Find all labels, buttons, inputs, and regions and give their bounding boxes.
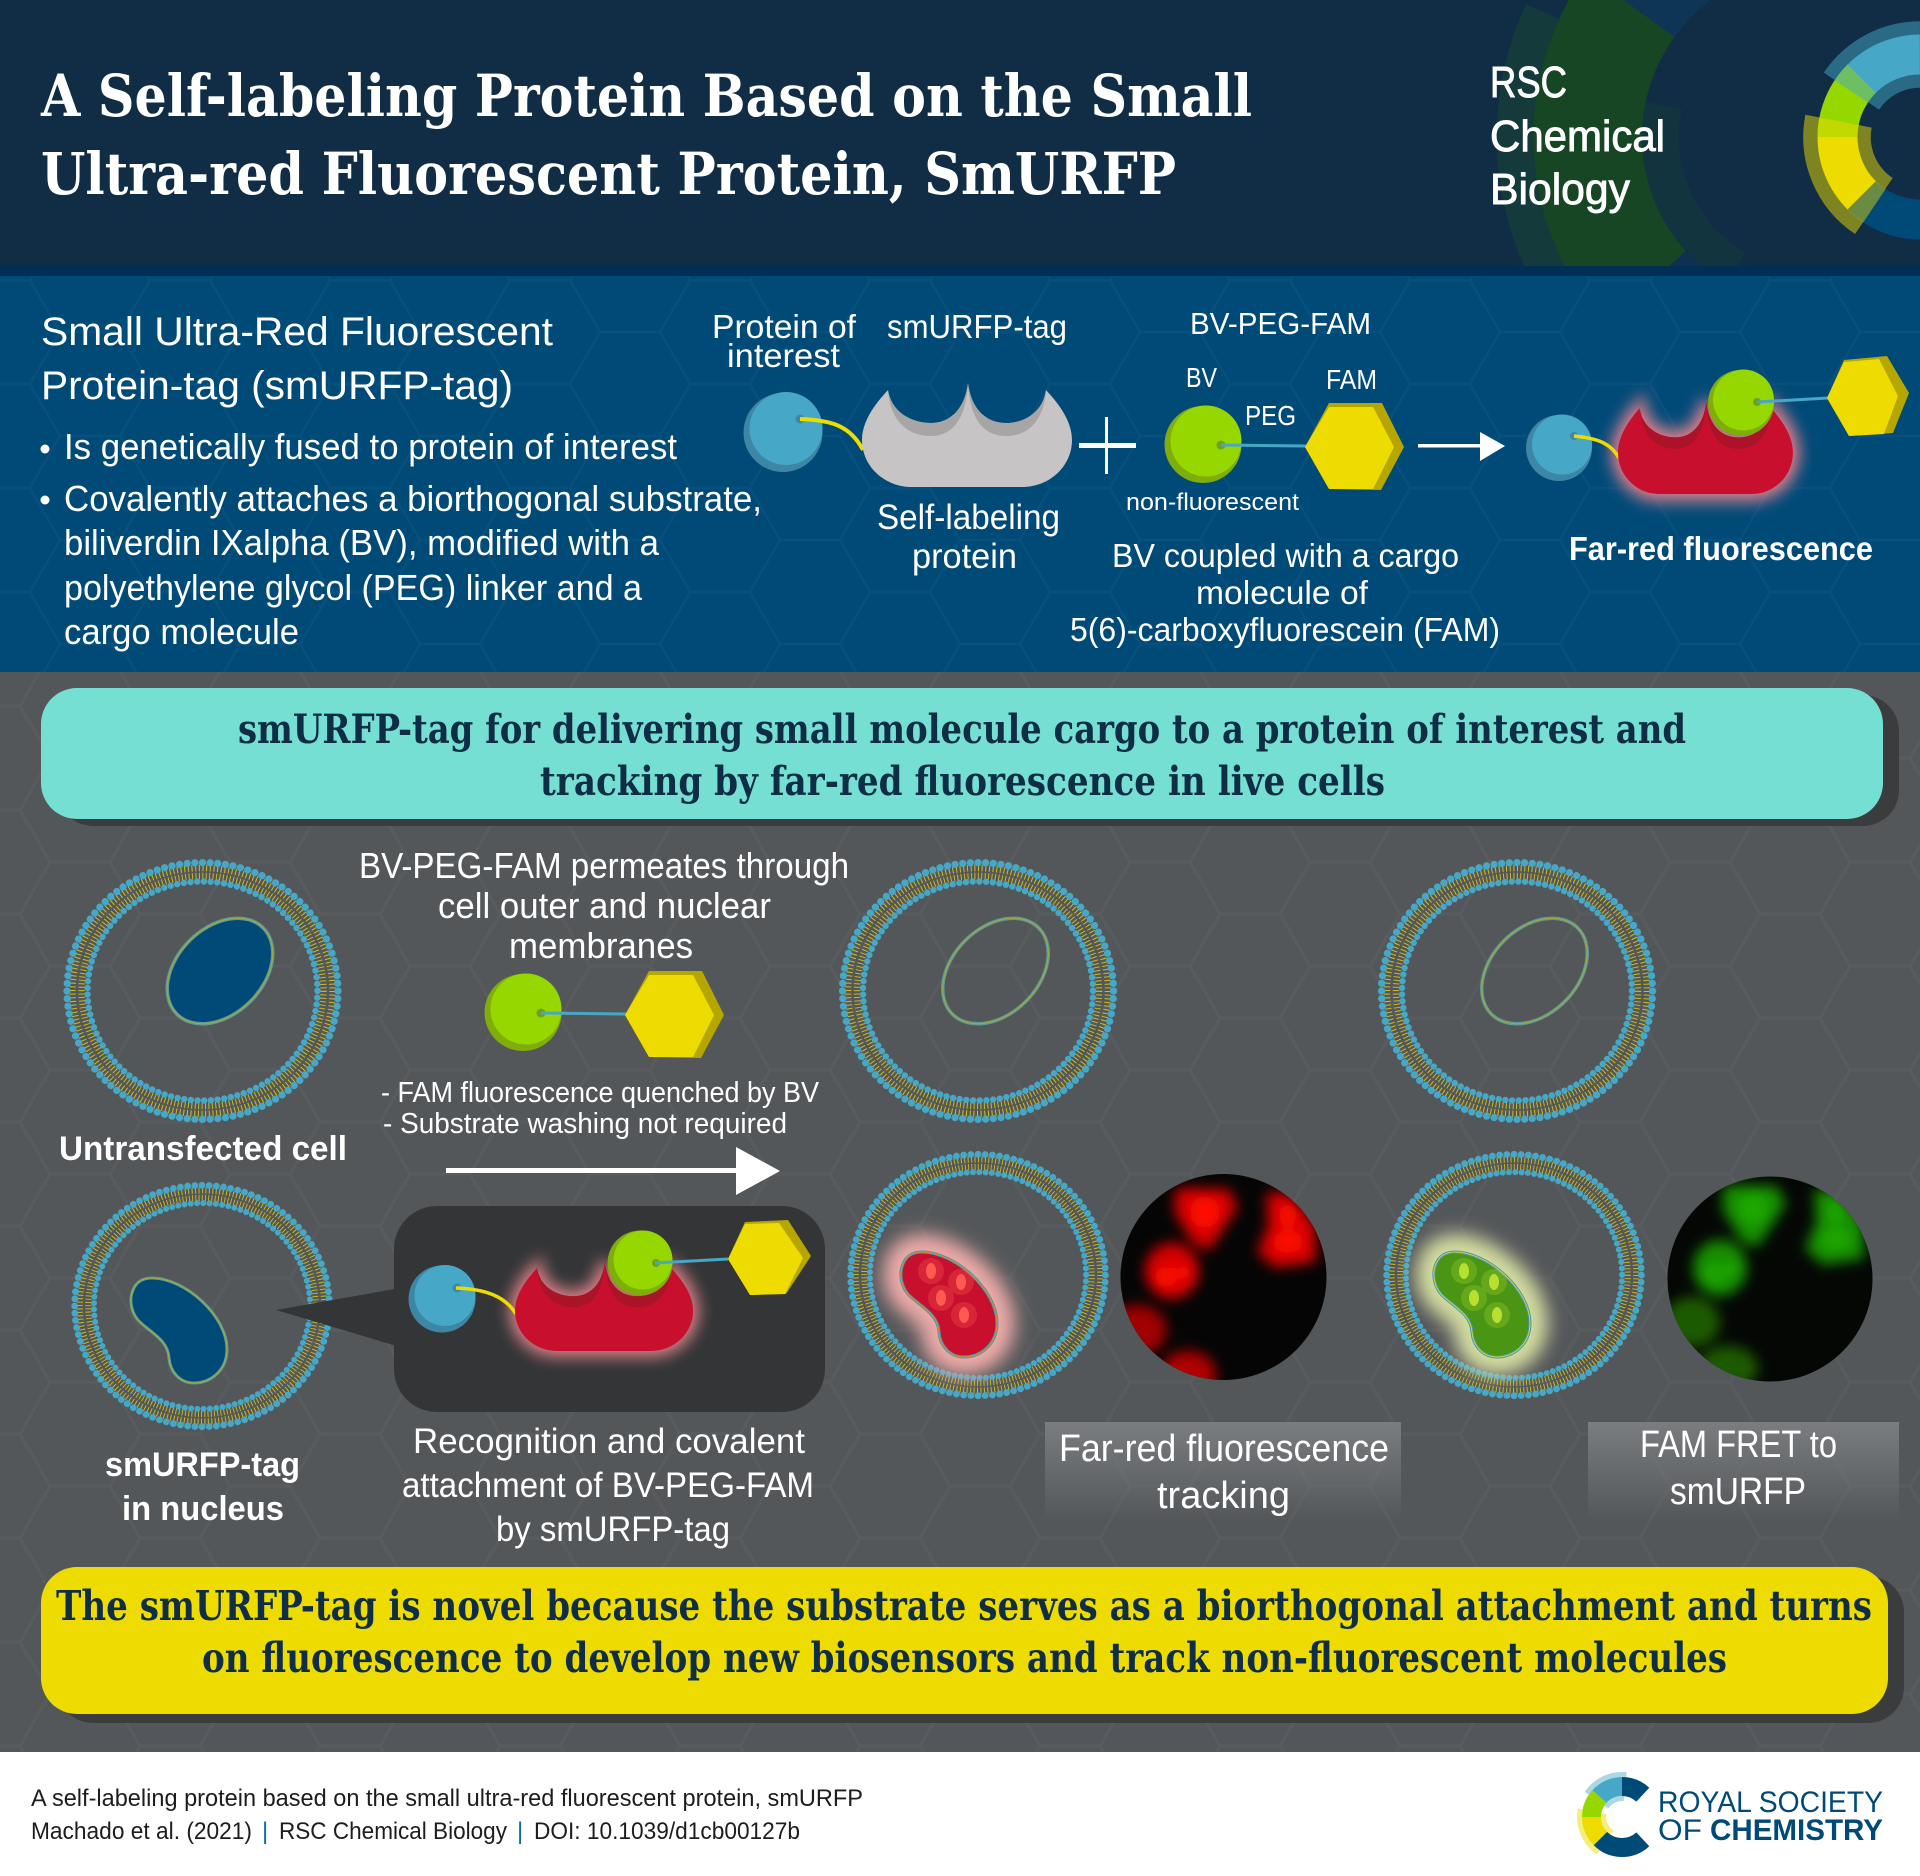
citation bbox=[31, 1785, 863, 1845]
icon: BV-PEG-FAM molecule bbox=[1164, 403, 1404, 490]
BV-PEG-FAM labels: FAM bbox=[1326, 364, 1377, 395]
BV-PEG-FAM labels: BV bbox=[1186, 362, 1217, 393]
label box: far-red fluorescence tracking: Far-red fluorescence bbox=[1059, 1428, 1389, 1470]
BV-PEG-FAM labels: non-fluorescent bbox=[1126, 489, 1299, 516]
arrow: to labeled cells bbox=[446, 1147, 780, 1195]
BV coupling description: BV coupled with a cargo bbox=[1112, 537, 1459, 574]
cell: upper middle, empty nucleus bbox=[842, 863, 1114, 1119]
icon: labeled far-red complex bbox=[1526, 356, 1909, 494]
intro bullet list: Is genetically fused to protein of interest bbox=[64, 426, 677, 467]
label box: far-red fluorescence tracking: tracking bbox=[1157, 1475, 1290, 1517]
intro heading bbox=[41, 310, 553, 408]
intro bullet list: Covalently attaches a biorthogonal substrate, bbox=[64, 478, 762, 519]
decorative large ring in header bbox=[1497, 0, 1711, 266]
permeation description: membranes bbox=[509, 925, 693, 966]
citation: A self-labeling protein based on the small ultra-red fluorescent protein, smURFP bbox=[31, 1785, 863, 1812]
cell: upper right, empty nucleus bbox=[1382, 863, 1652, 1119]
permeation description: cell outer and nuclear bbox=[438, 885, 771, 926]
self-labeling protein label: Self-labeling bbox=[877, 498, 1060, 537]
intro bullet list: polyethylene glycol (PEG) linker and a bbox=[64, 567, 643, 608]
Royal Society of Chemistry logo: ROYAL SOCIETY bbox=[1658, 1786, 1883, 1819]
callout: recognition detail bbox=[276, 1206, 825, 1412]
BV-PEG-FAM labels bbox=[1126, 306, 1377, 516]
intro bullet list: cargo molecule bbox=[64, 611, 299, 652]
far-red fluorescence label: Far-red fluorescence bbox=[1569, 530, 1873, 567]
label box: FAM FRET to smURFP: smURFP bbox=[1670, 1471, 1806, 1513]
label box: far-red fluorescence tracking bbox=[1045, 1422, 1401, 1520]
journal name bbox=[1490, 58, 1665, 214]
intro bullet list: biliverdin IXalpha (BV), modified with a bbox=[64, 522, 660, 563]
citation: | bbox=[517, 1818, 523, 1845]
citation: Machado et al. (2021) bbox=[31, 1818, 252, 1845]
citation: | bbox=[262, 1818, 268, 1845]
untransfected cell label: Untransfected cell bbox=[59, 1130, 347, 1168]
labels: protein of interest and tag: smURFP-tag bbox=[887, 308, 1067, 345]
title bbox=[40, 62, 1252, 208]
Royal Society of Chemistry logo: CHEMISTRY bbox=[1710, 1814, 1883, 1847]
recognition description: Recognition and covalent bbox=[413, 1422, 805, 1461]
labels: protein of interest and tag: interest bbox=[727, 337, 840, 374]
labels: protein of interest and tag bbox=[712, 308, 1067, 374]
BV-PEG-FAM labels: PEG bbox=[1245, 400, 1296, 431]
icon: grey self-labeling protein bbox=[862, 383, 1072, 487]
journal name: RSC bbox=[1490, 58, 1567, 107]
cell: FAM green fluorescent nucleus bbox=[1387, 1154, 1641, 1396]
title: A Self-labeling Protein Based on the Small bbox=[40, 62, 1252, 130]
yellow conclusion banner: on fluorescence to develop new biosensors and track non-fluorescent molecules bbox=[202, 1634, 1727, 1682]
smURFP-tag in nucleus label bbox=[105, 1446, 300, 1528]
citation: RSC Chemical Biology bbox=[279, 1818, 507, 1845]
BV coupling description: molecule of bbox=[1196, 574, 1369, 611]
cell: smURFP-tag in nucleus bbox=[75, 1185, 329, 1427]
self-labeling protein label: protein bbox=[912, 537, 1017, 576]
teal banner bbox=[41, 688, 1899, 826]
panel: smURFP-tag intro bbox=[0, 276, 1920, 672]
micrograph: far-red nuclei bbox=[1120, 1174, 1326, 1380]
permeation description bbox=[359, 845, 849, 966]
Royal Society of Chemistry logo bbox=[1563, 1758, 1883, 1876]
permeation description: BV-PEG-FAM permeates through bbox=[359, 845, 849, 886]
intro bullet list bbox=[40, 426, 762, 652]
RSC logo ring in header bbox=[1803, 21, 1920, 240]
title: Ultra-red Fluorescent Protein, SmURFP bbox=[41, 140, 1176, 208]
teal banner: tracking by far-red fluorescence in live cells bbox=[540, 758, 1385, 805]
arrow: reaction bbox=[1418, 432, 1505, 461]
recognition description bbox=[402, 1422, 814, 1549]
micrograph: green nuclei bbox=[1664, 1176, 1872, 1390]
BV coupling description: 5(6)-carboxyfluorescein (FAM) bbox=[1070, 611, 1500, 648]
Royal Society of Chemistry logo: OF bbox=[1658, 1814, 1702, 1847]
label box: FAM FRET to smURFP: FAM FRET to bbox=[1640, 1424, 1837, 1466]
substrate notes: - Substrate washing not required bbox=[383, 1108, 787, 1140]
smURFP-tag in nucleus label: smURFP-tag bbox=[105, 1446, 300, 1484]
dark band under header bbox=[0, 266, 1920, 276]
icon: BV-PEG-FAM substrate bbox=[484, 971, 724, 1058]
yellow conclusion banner bbox=[41, 1567, 1904, 1723]
teal banner: smURFP-tag for delivering small molecule cargo to a protein of interest and bbox=[238, 706, 1686, 753]
recognition description: attachment of BV-PEG-FAM bbox=[402, 1466, 814, 1505]
journal name: Biology bbox=[1490, 165, 1630, 214]
cell: untransfected bbox=[67, 863, 338, 1119]
journal name: Chemical bbox=[1490, 112, 1665, 161]
intro heading: Small Ultra-Red Fluorescent bbox=[41, 310, 553, 354]
cell: far-red fluorescent nucleus bbox=[851, 1154, 1105, 1396]
icon: protein of interest ball with linker bbox=[744, 392, 863, 472]
label box: FAM FRET to smURFP bbox=[1588, 1422, 1899, 1520]
header background bbox=[0, 0, 1920, 266]
BV coupling description bbox=[1070, 537, 1500, 648]
citation: DOI: 10.1039/d1cb00127b bbox=[534, 1818, 800, 1845]
self-labeling protein label bbox=[877, 498, 1060, 576]
panel: live cell tracking bbox=[0, 672, 1920, 1752]
footer bbox=[0, 1752, 1920, 1876]
substrate notes: - FAM fluorescence quenched by BV bbox=[381, 1077, 820, 1109]
intro heading: Protein-tag (smURFP-tag) bbox=[41, 364, 513, 408]
recognition description: by smURFP-tag bbox=[496, 1510, 730, 1549]
labels: protein of interest and tag: Protein of bbox=[712, 308, 857, 345]
smURFP-tag in nucleus label: in nucleus bbox=[122, 1490, 284, 1528]
icon: plus bbox=[1079, 417, 1136, 474]
BV-PEG-FAM labels: BV-PEG-FAM bbox=[1190, 306, 1371, 341]
substrate notes bbox=[381, 1077, 820, 1140]
